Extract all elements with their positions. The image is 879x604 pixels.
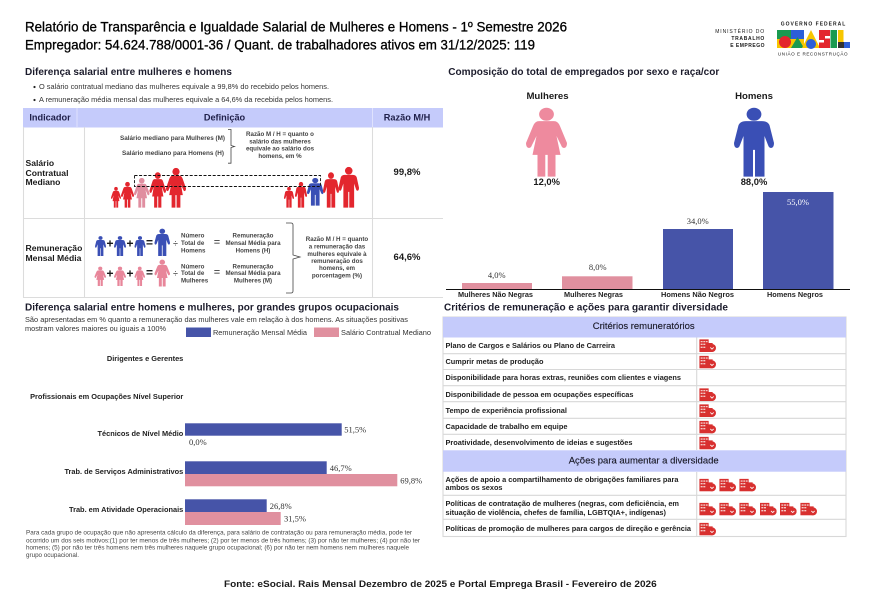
- logo: ministério do trabalho e emprego: TRABALHO: [731, 36, 765, 42]
- footnote: [26, 530, 420, 559]
- list: critérios: [446, 341, 681, 447]
- pictogram: mulheres: Mulheres: [526, 91, 569, 102]
- icon: soma mulheres: +: [126, 266, 134, 280]
- bar chart: sexo e raça/cor: 55,0%: [787, 197, 809, 207]
- row: remuneração mensal média: Homens: [181, 248, 206, 254]
- row: salário contratual mediano: Contratual: [26, 168, 68, 178]
- row: salário contratual mediano: 99,8%: [394, 167, 421, 178]
- row: remuneração mensal média: Total de: [181, 270, 205, 277]
- legend: Salário Contratual Mediano: [341, 328, 431, 337]
- row: salário contratual mediano: [26, 130, 421, 208]
- list: ações: situação de violência, chefes de família, LGBTQIA+, indígenas): [446, 508, 667, 517]
- table: indicadores: Definição: [204, 112, 246, 122]
- bar chart: sexo e raça/cor: 34,0%: [687, 216, 709, 226]
- bar chart: grupos ocupacionais: 69,8%: [400, 476, 422, 486]
- bar chart: grupos ocupacionais: [30, 354, 422, 525]
- bar chart: grupos ocupacionais: Técnicos de Nível Médio: [97, 429, 184, 438]
- icon: soma mulheres: ÷: [173, 268, 178, 278]
- row: remuneração mensal média: Número: [181, 232, 205, 240]
- bar chart: sexo e raça/cor: Mulheres Não Negras: [458, 290, 533, 299]
- icon: soma homens: +: [126, 236, 134, 250]
- row: salário contratual mediano: Mediano: [26, 177, 60, 187]
- bar chart: grupos ocupacionais: 51,5%: [344, 425, 366, 435]
- row: remuneração mensal média: porcentagem (%): [312, 272, 362, 280]
- bullet list: A remuneração média mensal das mulheres equivale a 64,6% da recebida pelos homens.: [39, 95, 333, 104]
- table: indicadores: [23, 108, 443, 298]
- row: remuneração mensal média: Remuneração: [233, 232, 274, 240]
- list: ações: Políticas de promoção de mulheres para cargos de direção e gerência: [446, 524, 692, 533]
- list: critérios: Disponibilidade de pessoa em ocupações específicas: [446, 390, 634, 399]
- icon: soma homens: [95, 229, 178, 256]
- footnote: grupo ocupacional.: [26, 552, 79, 559]
- bar chart: grupos ocupacionais: Trab. em Atividade Operacionais: [69, 505, 183, 514]
- table: indicadores: Indicador: [29, 112, 71, 122]
- icon: soma homens: ÷: [173, 238, 178, 248]
- icon: soma mulheres: [94, 260, 178, 286]
- list: ações: Políticas de contratação de mulheres (negras, com deficiência, em: [446, 499, 679, 508]
- icon: soma mulheres: +: [106, 266, 114, 280]
- logo: ministério do trabalho e emprego: [715, 28, 765, 49]
- icon: soma homens: =: [146, 236, 153, 250]
- row: remuneração mensal média: Remuneração: [233, 264, 274, 270]
- row: remuneração mensal média: a remuneração das: [309, 244, 366, 250]
- row: salário contratual mediano: salário das mulheres: [249, 138, 311, 146]
- panel: critérios de remuneração e ações: [443, 302, 846, 536]
- row: remuneração mensal média: homens, em: [319, 265, 356, 272]
- logo: governo federal brasil: UNIÃO E RECONSTRUÇÃO: [778, 50, 848, 56]
- row: remuneração mensal média: remuneração dos: [311, 258, 363, 265]
- logo: governo federal brasil: GOVERNO FEDERAL: [781, 22, 846, 28]
- heading: Diferença salarial entre homens e mulheres, por grandes grupos ocupacionais: [25, 302, 399, 314]
- description: mostram valores maiores ou iguais a 100%: [25, 324, 166, 333]
- bar chart: grupos ocupacionais: 0,0%: [189, 437, 207, 447]
- row: remuneração mensal média: =: [214, 266, 220, 278]
- list: critérios: Proatividade, desenvolvimento de ideias e sugestões: [446, 438, 632, 447]
- row: remuneração mensal média: Número: [181, 264, 205, 270]
- bar chart: grupos ocupacionais: Trab. de Serviços Administrativos: [64, 467, 183, 476]
- row: remuneração mensal média: Mensal Média para: [225, 270, 281, 277]
- pictogram: homens: 88,0%: [741, 176, 768, 187]
- row: remuneração mensal média: =: [214, 236, 220, 248]
- icon: soma mulheres: =: [146, 266, 153, 280]
- row: salário contratual mediano: Salário mediano para Homens (H): [122, 150, 224, 157]
- list: ações: [446, 475, 692, 533]
- icons: ações: [699, 479, 817, 535]
- row: remuneração mensal média: Total de: [181, 240, 205, 247]
- row: salário contratual mediano: Salário mediano para Mulheres (M): [120, 135, 225, 142]
- row: remuneração mensal média: Mulheres: [181, 278, 209, 284]
- icon: família mulheres: [111, 168, 186, 208]
- row: salário contratual mediano: Razão M / H = quanto o: [246, 131, 314, 138]
- logo: governo federal brasil: [777, 22, 850, 56]
- panel: diferença salarial entre mulheres e homens: [23, 66, 443, 298]
- bar chart: sexo e raça/cor: 4,0%: [488, 270, 506, 280]
- bar chart: grupos ocupacionais: 26,8%: [270, 501, 292, 511]
- bar chart: sexo e raça/cor: 8,0%: [589, 262, 607, 272]
- list: critérios: Disponibilidade para horas extras, reuniões com clientes e viagens: [446, 373, 681, 382]
- legend: Remuneração Mensal Média: [213, 328, 308, 337]
- header: critérios remuneratórios: Critérios remuneratórios: [593, 321, 695, 332]
- row: remuneração mensal média: Mensal Média: [26, 253, 82, 263]
- title: Empregador: 54.624.788/0001-36 / Quant. de trabalhadores ativos em 31/12/2025: 119: [25, 38, 535, 52]
- list: critérios: Tempo de experiência profissional: [446, 406, 567, 415]
- heading: Diferença salarial entre mulheres e homens: [25, 66, 232, 78]
- bar chart: grupos ocupacionais: Profissionais em Ocupações Nível Superior: [30, 392, 183, 401]
- row: remuneração mensal média: Mulheres (M): [234, 278, 272, 284]
- list: critérios: Capacidade de trabalho em equipe: [446, 422, 568, 431]
- header: critérios remuneratórios: [443, 317, 846, 338]
- table: indicadores: Razão M/H: [384, 112, 431, 122]
- legend: [186, 328, 431, 337]
- panel: composição do total de empregados: [446, 66, 850, 299]
- source footer: Fonte: eSocial. Rais Mensal Dezembro de 2025 e Portal Emprega Brasil - Fevereiro de 2026: [224, 579, 657, 590]
- row: salário contratual mediano: homens, em %: [258, 153, 302, 160]
- bullet list: O salário contratual mediano das mulheres equivale a 99,8% do recebido pelos homens.: [39, 82, 329, 91]
- icons: critérios: [699, 339, 716, 449]
- description: [25, 315, 408, 333]
- row: remuneração mensal média: mulheres equivale à: [307, 251, 367, 258]
- panel: diferença salarial por grupos ocupacionais: [25, 302, 431, 559]
- title: Relatório de Transparência e Igualdade Salarial de Mulheres e Homens - 1º Semestre 2026: [25, 20, 567, 34]
- logo: ministério do trabalho e emprego: MINISTÉRIO DO: [715, 28, 765, 35]
- bar chart: grupos ocupacionais: 46,7%: [330, 463, 352, 473]
- bar chart: grupos ocupacionais: Dirigentes e Gerentes: [107, 354, 183, 363]
- pictogram: mulheres: [526, 91, 569, 187]
- header: ações para aumentar a diversidade: [443, 450, 846, 472]
- bar chart: sexo e raça/cor: Homens Negros: [767, 290, 823, 299]
- bar chart: sexo e raça/cor: Mulheres Negras: [564, 290, 623, 299]
- heading: Composição do total de empregados por sexo e raça/cor: [448, 66, 719, 78]
- logo: ministério do trabalho e emprego: E EMPREGO: [730, 43, 765, 49]
- header: ações para aumentar a diversidade: Ações para aumentar a diversidade: [569, 456, 719, 466]
- pictogram: homens: [734, 91, 774, 187]
- list: ações: Ações de apoio a compartilhamento de obrigações familiares para: [446, 475, 680, 484]
- row: salário contratual mediano: Salário: [26, 158, 54, 168]
- row: remuneração mensal média: Razão M / H = quanto: [306, 236, 368, 243]
- dashed median box: [134, 176, 320, 186]
- table grid: [443, 317, 846, 536]
- title: [25, 20, 567, 52]
- bar chart: grupos ocupacionais: 31,5%: [284, 514, 306, 524]
- pictogram: homens: Homens: [735, 91, 773, 102]
- description: São apresentadas em % quanto a remuneração das mulheres vale em relação à dos homens. As situações positivas: [25, 315, 408, 324]
- footnote: Para cada grupo de ocupação que não apresenta cálculo da diferença, para salário de contratação ou para remuneração média, pode ter: [26, 530, 412, 536]
- bar chart: sexo e raça/cor: [446, 192, 850, 299]
- list: critérios: Plano de Cargos e Salários ou Plano de Carreira: [446, 341, 616, 350]
- row: remuneração mensal média: 64,6%: [394, 252, 421, 263]
- heading: Critérios de remuneração e ações para garantir diversidade: [444, 302, 728, 314]
- icon: família homens: [284, 167, 359, 208]
- bar chart: sexo e raça/cor: Homens Não Negros: [661, 290, 734, 299]
- row: remuneração mensal média: Mensal Média para: [225, 240, 281, 247]
- row: salário contratual mediano: equivale ao salário dos: [246, 146, 315, 152]
- icon: soma homens: +: [106, 236, 114, 250]
- row: remuneração mensal média: Homens (H): [236, 248, 270, 254]
- pictogram: mulheres: 12,0%: [533, 176, 561, 187]
- bullet list: [33, 82, 333, 104]
- row: remuneração mensal média: [26, 223, 421, 293]
- list: ações: ambos os sexos: [446, 483, 502, 492]
- footnote: homens; (5) por não ter três homens nem três mulheres naquele grupo ocupacional; (6) por não ter nem homens nem mulheres naquele: [26, 544, 409, 552]
- list: critérios: Cumprir metas de produção: [446, 357, 544, 366]
- footnote: ocorrido um dos seis motivos:(1) por ter menos de três mulheres; (2) por ter menos de três homens; (3) por não ter mulheres; (4) por não ter: [26, 538, 420, 544]
- row: remuneração mensal média: Remuneração: [26, 243, 82, 253]
